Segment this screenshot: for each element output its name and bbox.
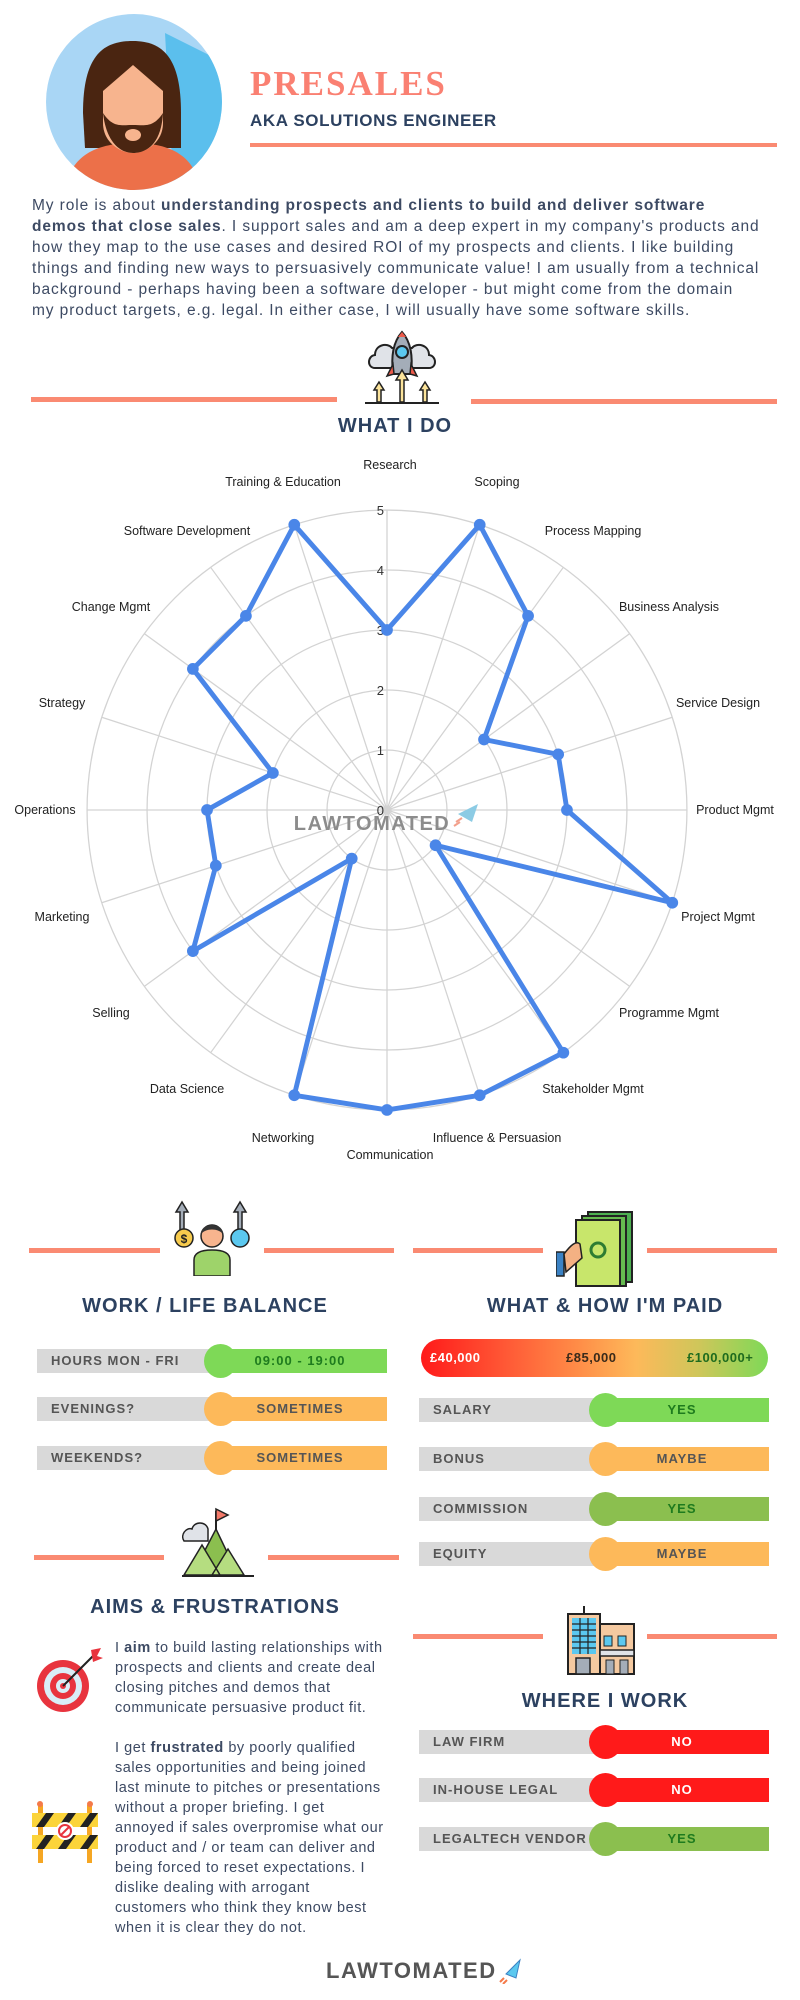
- title: PRESALES: [250, 64, 447, 103]
- footer logo: LAWTOMATED: [326, 1958, 497, 1983]
- row: equity: [419, 1542, 769, 1566]
- frustration text: sales opportunities and being joined: [115, 1760, 366, 1776]
- axis labels: Influence & Persuasion: [433, 1131, 561, 1145]
- axis labels: Service Design: [676, 696, 760, 710]
- axis labels: Marketing: [35, 910, 89, 924]
- scale numbers: 5: [377, 503, 384, 518]
- row: hours: 09:00 - 19:00: [254, 1353, 346, 1368]
- axis labels: Business Analysis: [619, 600, 719, 614]
- watermark: LAWTOMATED: [294, 813, 450, 835]
- axis labels: Stakeholder Mgmt: [542, 1082, 644, 1096]
- scale numbers: 0: [377, 803, 384, 818]
- frustration text: [115, 1740, 384, 1936]
- axis labels: Communication: [347, 1148, 433, 1162]
- axis labels: Networking: [252, 1131, 314, 1145]
- axis labels: Strategy: [39, 696, 86, 710]
- icon: target: [37, 1648, 103, 1712]
- scale numbers: 4: [377, 563, 384, 578]
- axis labels: Software Development: [124, 524, 251, 538]
- row: weekends: [37, 1446, 387, 1470]
- intro paragraph: things and finding new ways to persuasively communicate value! I am usually from a technical: [32, 260, 759, 277]
- row: weekends: SOMETIMES: [256, 1450, 344, 1465]
- salary range bar: £85,000: [566, 1350, 616, 1365]
- frustration text: when it is clear they do not.: [115, 1920, 307, 1936]
- intro paragraph: how they map to the use cases and desired ROI of my prospects and clients. I like building: [32, 239, 734, 256]
- axis labels: Product Mgmt: [696, 803, 774, 817]
- frustration text: being forced to reset expectations. I: [115, 1860, 365, 1876]
- row: salary: YES: [667, 1402, 696, 1417]
- axis labels: Process Mapping: [545, 524, 641, 538]
- row: evenings: [37, 1397, 387, 1421]
- row: hours: [37, 1349, 387, 1373]
- heading: aims & frustrations: AIMS & FRUSTRATIONS: [90, 1596, 340, 1618]
- aim text: closing pitches and demos that: [115, 1680, 331, 1696]
- intro paragraph: my product targets, e.g. legal. In either case, I will usually have some software skills.: [32, 302, 690, 319]
- row: law firm: LAW FIRM: [433, 1734, 505, 1749]
- row: bonus: [419, 1447, 769, 1471]
- row: commission: [419, 1497, 769, 1521]
- avatar: [46, 14, 222, 190]
- data polygon: [187, 519, 678, 1116]
- frustration text: dislike dealing with arrogant: [115, 1880, 310, 1896]
- icon: barrier: [32, 1801, 98, 1863]
- row: commission: COMMISSION: [433, 1501, 528, 1516]
- row: legaltech vendor: LEGALTECH VENDOR: [433, 1831, 587, 1846]
- row: in-house legal: [419, 1778, 769, 1802]
- row: salary: SALARY: [433, 1402, 492, 1417]
- aim text: prospects and clients and create deal: [115, 1660, 376, 1676]
- row: in-house legal: IN-HOUSE LEGAL: [433, 1782, 558, 1797]
- radar chart: [14, 458, 774, 1162]
- row: salary: [419, 1398, 769, 1422]
- axis labels: Data Science: [150, 1082, 224, 1096]
- axis labels: [14, 458, 774, 1162]
- icon: work life balance person: $: [181, 1232, 188, 1246]
- row: equity: EQUITY: [433, 1546, 487, 1561]
- frustration text: I get frustrated by poorly qualified: [115, 1740, 356, 1756]
- row: law firm: NO: [671, 1734, 693, 1749]
- axis labels: Programme Mgmt: [619, 1006, 720, 1020]
- row: equity: MAYBE: [657, 1546, 707, 1561]
- row: legaltech vendor: YES: [667, 1831, 696, 1846]
- icon: building: [567, 1606, 635, 1675]
- axis labels: Training & Education: [225, 475, 341, 489]
- icon: mountain: [182, 1508, 254, 1577]
- watermark: [294, 804, 478, 835]
- scale numbers: 1: [377, 743, 384, 758]
- aim text: communicate persuasive product fit.: [115, 1700, 366, 1716]
- salary range bar: £100,000+: [687, 1350, 753, 1365]
- heading: what i do: WHAT I DO: [338, 415, 452, 437]
- intro paragraph: demos that close sales. I support sales and am a deep expert in my company's products and: [32, 218, 760, 235]
- frustration text: last minute to pitches or presentations: [115, 1780, 381, 1796]
- heading: work life balance: WORK / LIFE BALANCE: [82, 1295, 328, 1317]
- aim text: I aim to build lasting relationships with: [115, 1640, 383, 1656]
- intro paragraph: [32, 197, 760, 319]
- row: weekends: WEEKENDS?: [51, 1450, 143, 1465]
- scale numbers: 3: [377, 623, 384, 638]
- frustration text: customers who think they know best: [115, 1900, 367, 1916]
- aim text: [115, 1640, 383, 1716]
- salary range bar: [421, 1339, 768, 1377]
- axis labels: Operations: [14, 803, 76, 817]
- axis labels: Scoping: [474, 475, 520, 489]
- scale numbers: [377, 503, 384, 818]
- frustration text: annoyed if sales overpromise what our: [115, 1820, 384, 1836]
- intro paragraph: background - perhaps having been a software developer - but might come from the domain: [32, 281, 733, 298]
- icon: work life balance person: [174, 1200, 250, 1276]
- scale numbers: 2: [377, 683, 384, 698]
- icon: money: [556, 1211, 633, 1287]
- axis labels: Selling: [92, 1006, 130, 1020]
- row: evenings: EVENINGS?: [51, 1401, 135, 1416]
- heading: what & how paid: WHAT & HOW I'M PAID: [487, 1295, 723, 1317]
- subtitle: AKA SOLUTIONS ENGINEER: [250, 111, 497, 130]
- heading: where i work: WHERE I WORK: [522, 1690, 688, 1712]
- frustration text: product and / or team can deliver and: [115, 1840, 376, 1856]
- row: hours: HOURS MON - FRI: [51, 1353, 179, 1368]
- icon: rocket: [365, 330, 439, 404]
- row: bonus: MAYBE: [657, 1451, 707, 1466]
- axis labels: Project Mgmt: [681, 910, 755, 924]
- row: law firm: [419, 1730, 769, 1754]
- axis labels: Change Mgmt: [72, 600, 151, 614]
- axis labels: Research: [363, 458, 417, 472]
- row: commission: YES: [667, 1501, 696, 1516]
- row: bonus: BONUS: [433, 1451, 485, 1466]
- intro paragraph: My role is about understanding prospects and clients to build and deliver software: [32, 197, 705, 214]
- salary range bar: £40,000: [430, 1350, 480, 1365]
- frustration text: without a proper briefing. I get: [115, 1800, 324, 1816]
- row: in-house legal: NO: [671, 1782, 693, 1797]
- row: legaltech vendor: [419, 1827, 769, 1851]
- row: evenings: SOMETIMES: [256, 1401, 344, 1416]
